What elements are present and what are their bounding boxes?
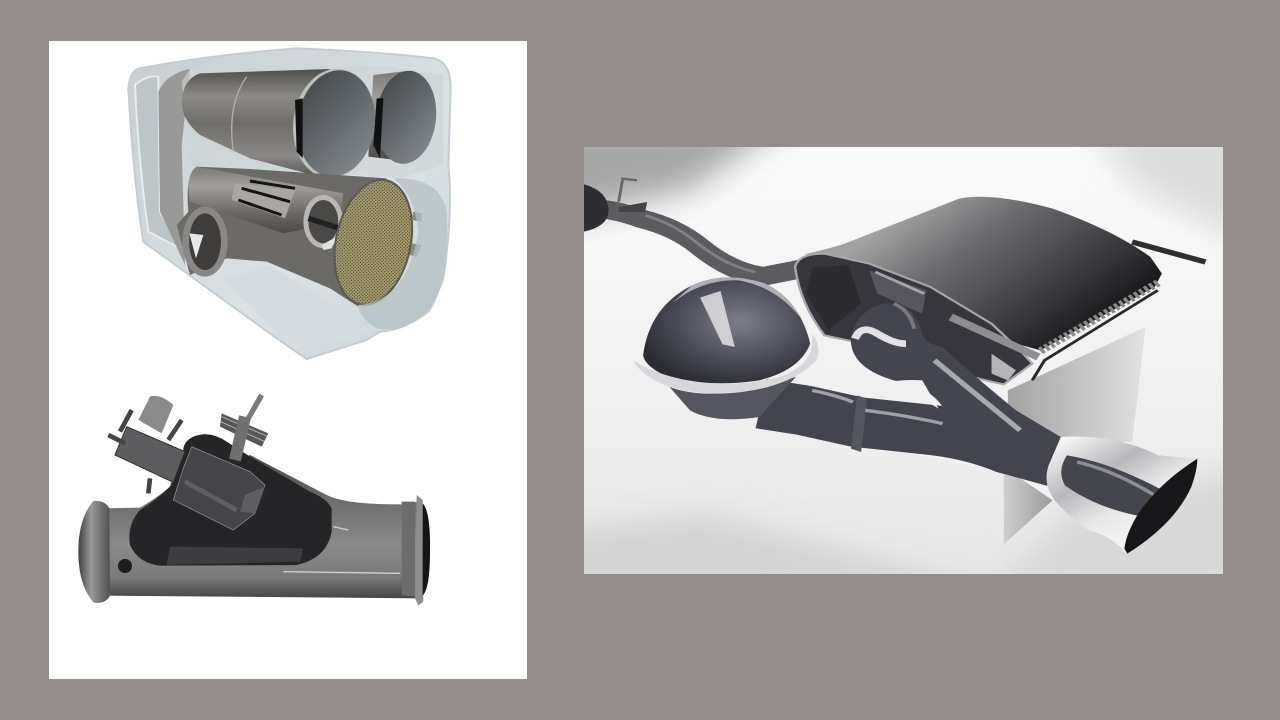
internal flap (173, 447, 265, 530)
mesh face (324, 173, 423, 312)
right flange (402, 502, 415, 597)
dark cutaway (129, 434, 332, 566)
muffler mounting rod (1132, 242, 1205, 262)
illustration: transparent catalytic converter housing (128, 48, 451, 359)
side outlet (182, 207, 228, 277)
scene shading (584, 147, 1223, 574)
lower cylinder with perforations (177, 167, 423, 312)
side hole (118, 559, 132, 573)
muffler cut face (795, 254, 1032, 384)
illustration: Y-shaped pipe valve (78, 395, 430, 606)
inner bracket column (158, 69, 190, 265)
upper left cylinder (182, 63, 382, 183)
muffler (795, 197, 1205, 384)
shine lines (283, 527, 400, 573)
right actuator (220, 395, 268, 460)
resonator dome (633, 277, 819, 419)
tail pipe opening (1124, 459, 1197, 554)
inlet pipe (582, 179, 802, 276)
white gap in Y (896, 380, 938, 408)
front translucent cap (358, 178, 447, 329)
panel: right muffler photo (584, 147, 1223, 574)
twin Y pipe (761, 303, 1061, 464)
panel: left white image panel (49, 41, 527, 679)
left actuator (108, 396, 185, 493)
lower branch (761, 404, 1057, 462)
inner tube and nut (303, 195, 343, 248)
chrome tail pipe (1047, 437, 1197, 554)
floor tray (223, 265, 370, 350)
main body (103, 455, 420, 598)
upper branch (850, 303, 1060, 437)
perforated rear edge (1040, 282, 1159, 351)
upper right cylinder (368, 68, 441, 167)
white plinth block (1004, 327, 1146, 544)
left flange (78, 501, 110, 603)
translucent housing (128, 48, 451, 359)
